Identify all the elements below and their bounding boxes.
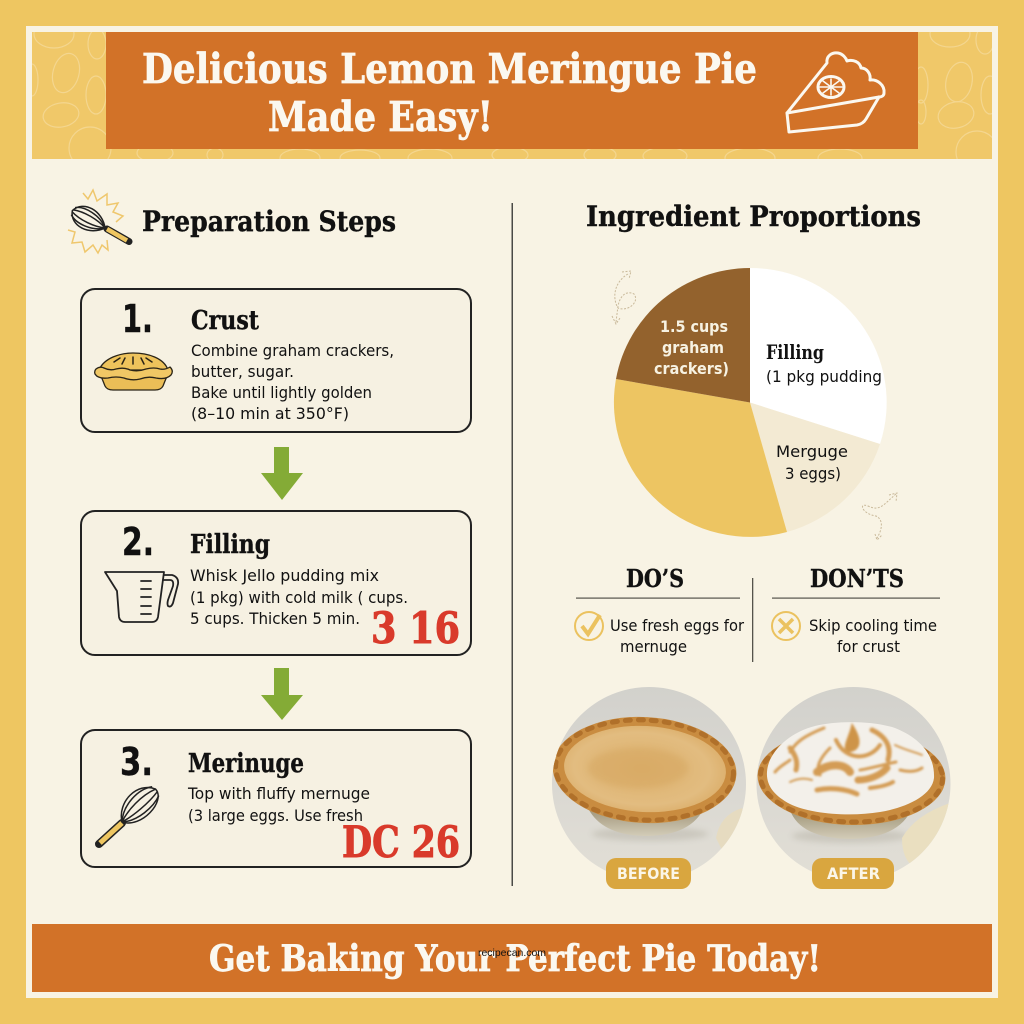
do text: mernuge <box>620 637 687 656</box>
icon: pie <box>95 353 172 390</box>
icon: pie slice <box>787 53 884 132</box>
pie chart <box>614 268 887 537</box>
label: crust: crackers) <box>654 359 729 378</box>
step text: filling: Whisk Jello pudding mix <box>190 566 379 585</box>
slice: yellow <box>614 379 787 537</box>
step text: filling: 5 cups. Thicken 5 min. <box>190 609 360 628</box>
title: Delicious Lemon Meringue Pie <box>142 45 757 93</box>
slice: crust <box>616 268 750 402</box>
title: Made Easy! <box>268 93 493 141</box>
step number 1: 1. <box>122 297 153 341</box>
heading: ingredient proportions: Ingredient Proportions <box>586 200 921 233</box>
step text: filling: (1 pkg) with cold milk ( cups. <box>190 588 408 607</box>
lemon pattern band <box>32 32 992 159</box>
step 2 card <box>81 511 471 655</box>
photo: after meringue <box>756 687 950 872</box>
label: filling: Filling <box>766 340 824 364</box>
heading: do's: DO’S <box>626 564 684 593</box>
overlay number: 3 16: 3 16 <box>371 604 460 654</box>
icon: measuring cup <box>105 572 178 622</box>
watermark: recipecan.com <box>478 947 546 959</box>
icon: check <box>575 612 603 640</box>
step title: crust: Crust <box>191 306 259 336</box>
title banner <box>106 32 918 149</box>
icon: dashed arrow bottom right <box>862 493 897 540</box>
label: crust: 1.5 cups <box>660 317 728 336</box>
badge: after <box>812 858 894 889</box>
label: filling: (1 pkg pudding <box>766 367 882 386</box>
badge: before <box>606 858 691 889</box>
overlay number: DC 26: DC 26 <box>342 818 460 868</box>
badge: after: AFTER <box>827 864 880 883</box>
panel: dos and donts <box>575 564 940 662</box>
label: meringue: 3 eggs) <box>785 464 841 483</box>
step text: merinuge: (3 large eggs. Use fresh <box>188 806 363 825</box>
panel: ingredient proportions <box>586 200 921 540</box>
step text: crust: Combine graham crackers, <box>191 341 394 360</box>
vertical divider <box>512 203 513 886</box>
label: crust: graham <box>662 338 724 357</box>
don't text: Skip cooling time <box>809 616 937 635</box>
don't text: for crust <box>837 637 900 656</box>
step text: crust: Bake until lightly golden <box>191 383 372 402</box>
label: meringue: Merguge <box>776 442 848 461</box>
step text: merinuge: Top with fluffy mernuge <box>187 784 370 803</box>
heading: don'ts: DON’TS <box>810 564 904 593</box>
arrow: step 1 to 2 <box>261 447 303 500</box>
step number 2: 2. <box>122 520 154 564</box>
footer text: Get Baking Your Perfect Pie Today! <box>209 938 821 980</box>
panel: preparation steps <box>32 190 992 992</box>
slice: meringue <box>750 402 880 532</box>
step text: crust: (8–10 min at 350°F) <box>191 404 349 423</box>
arrow: step 2 to 3 <box>261 668 303 720</box>
step text: crust: butter, sugar. <box>191 362 294 381</box>
icon: dashed arrow top left <box>612 271 636 324</box>
heading: preparation steps: Preparation Steps <box>142 205 396 238</box>
icon: cross <box>772 612 800 640</box>
step 1 card <box>81 289 471 432</box>
step 3 card <box>81 730 471 868</box>
step title: merinuge: Merinuge <box>188 749 304 779</box>
icon: header whisk <box>67 190 129 253</box>
do text: Use fresh eggs for <box>610 616 744 635</box>
badge: before: BEFORE <box>617 864 680 883</box>
footer banner <box>32 924 992 992</box>
photo: before crust <box>552 687 746 872</box>
icon: whisk <box>99 780 165 844</box>
step title: filling: Filling <box>190 530 270 560</box>
step number 3: 3. <box>120 740 153 784</box>
slice: filling <box>750 268 887 444</box>
